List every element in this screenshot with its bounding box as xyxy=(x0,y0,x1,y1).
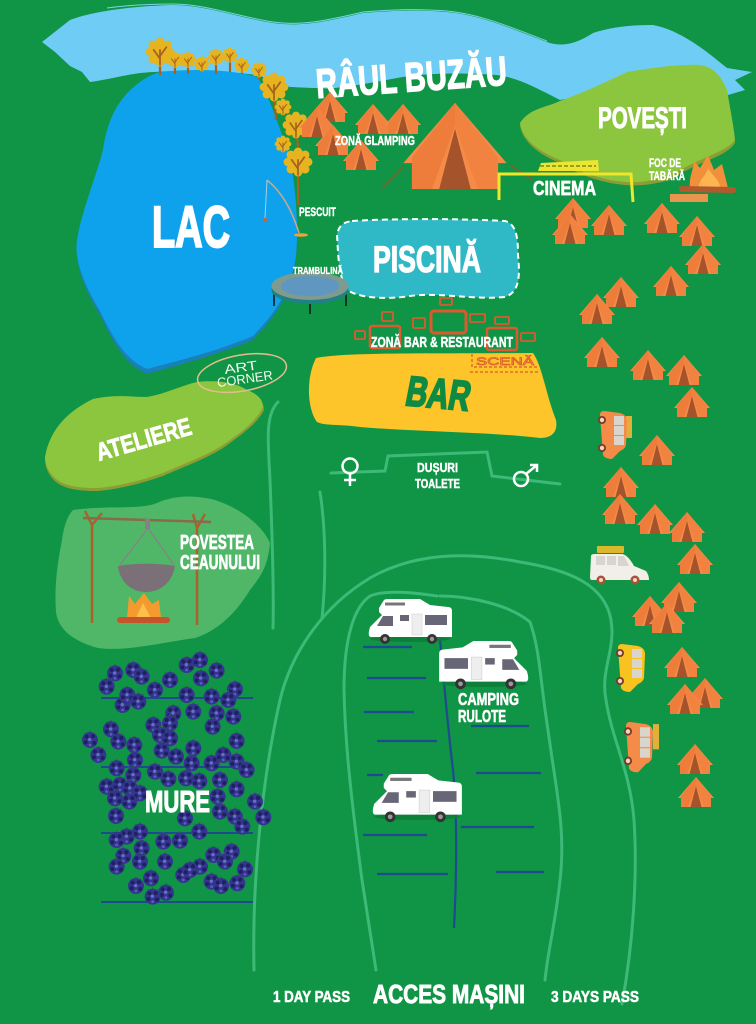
cauldron pot xyxy=(118,519,175,592)
campfire xyxy=(649,155,733,198)
cinema label: CINEMA xyxy=(533,177,596,200)
blackberry rows xyxy=(101,698,253,902)
bar area xyxy=(309,353,556,438)
campfire label: TABĂRĂ xyxy=(649,170,685,183)
river: Râul Buzău xyxy=(42,4,752,107)
cinema xyxy=(499,160,633,202)
blackberries label: MURE xyxy=(145,784,210,819)
caravan camping label: RULOTE xyxy=(458,706,506,726)
female symbol xyxy=(342,458,358,486)
trampoline xyxy=(272,264,348,314)
art corner xyxy=(195,347,289,399)
pool xyxy=(337,219,519,298)
pescuit label: PESCUIT xyxy=(299,207,336,219)
yellow van xyxy=(616,644,645,692)
paths xyxy=(254,402,635,1004)
poveşti area xyxy=(520,65,735,185)
white van xyxy=(590,546,649,584)
cauldron fire xyxy=(120,593,167,620)
stage: SCENĂ xyxy=(476,355,535,368)
caravan pitch lines xyxy=(363,640,544,928)
glamping label: ZONĂ GLAMPING xyxy=(335,133,415,148)
male symbol xyxy=(514,465,537,486)
workshops label: ATELIERE xyxy=(93,413,195,467)
bar label: BAR xyxy=(402,368,475,419)
three-day pass: 3 DAYS PASS xyxy=(551,989,639,1006)
lake label: LAC xyxy=(152,195,230,260)
one-day pass: 1 DAY PASS xyxy=(273,989,350,1006)
stage xyxy=(470,354,538,372)
campfire label: FOC DE xyxy=(649,158,681,170)
cauldron label: POVESTEA xyxy=(180,532,254,554)
art corner: ART xyxy=(223,358,258,377)
lake xyxy=(77,70,297,374)
big tent xyxy=(382,103,533,189)
footer labels xyxy=(273,979,639,1009)
river name: RÂUL BUZĂU xyxy=(314,48,508,107)
bar zone label: ZONĂ BAR & RESTAURANT xyxy=(371,334,513,351)
tents: right-hand camping field xyxy=(552,198,723,807)
fishing rod xyxy=(263,180,336,237)
tripod xyxy=(83,511,211,625)
showers and toilets label: DUȘURI xyxy=(417,461,458,475)
caravans xyxy=(369,599,528,822)
glamping tents xyxy=(299,92,533,189)
bar and restaurant tables xyxy=(355,298,535,350)
trambulină label: TRAMBULINĂ xyxy=(293,264,343,277)
workshops area xyxy=(45,381,264,491)
caravan camping label: CAMPING xyxy=(458,689,519,709)
orange van 1 xyxy=(598,411,632,459)
orange van 2 xyxy=(624,722,659,772)
cauldron story area xyxy=(55,497,270,649)
art corner: CORNER xyxy=(216,367,274,390)
poveşti label: POVEȘTI xyxy=(598,102,687,135)
blackberries xyxy=(82,650,271,905)
car access: ACCES MAȘINI xyxy=(373,979,525,1009)
pool label: PISCINĂ xyxy=(373,239,481,280)
cauldron label: CEAUNULUI xyxy=(180,552,260,574)
showers and toilets label: TOALETE xyxy=(415,477,460,491)
trees along the lake xyxy=(146,38,312,205)
